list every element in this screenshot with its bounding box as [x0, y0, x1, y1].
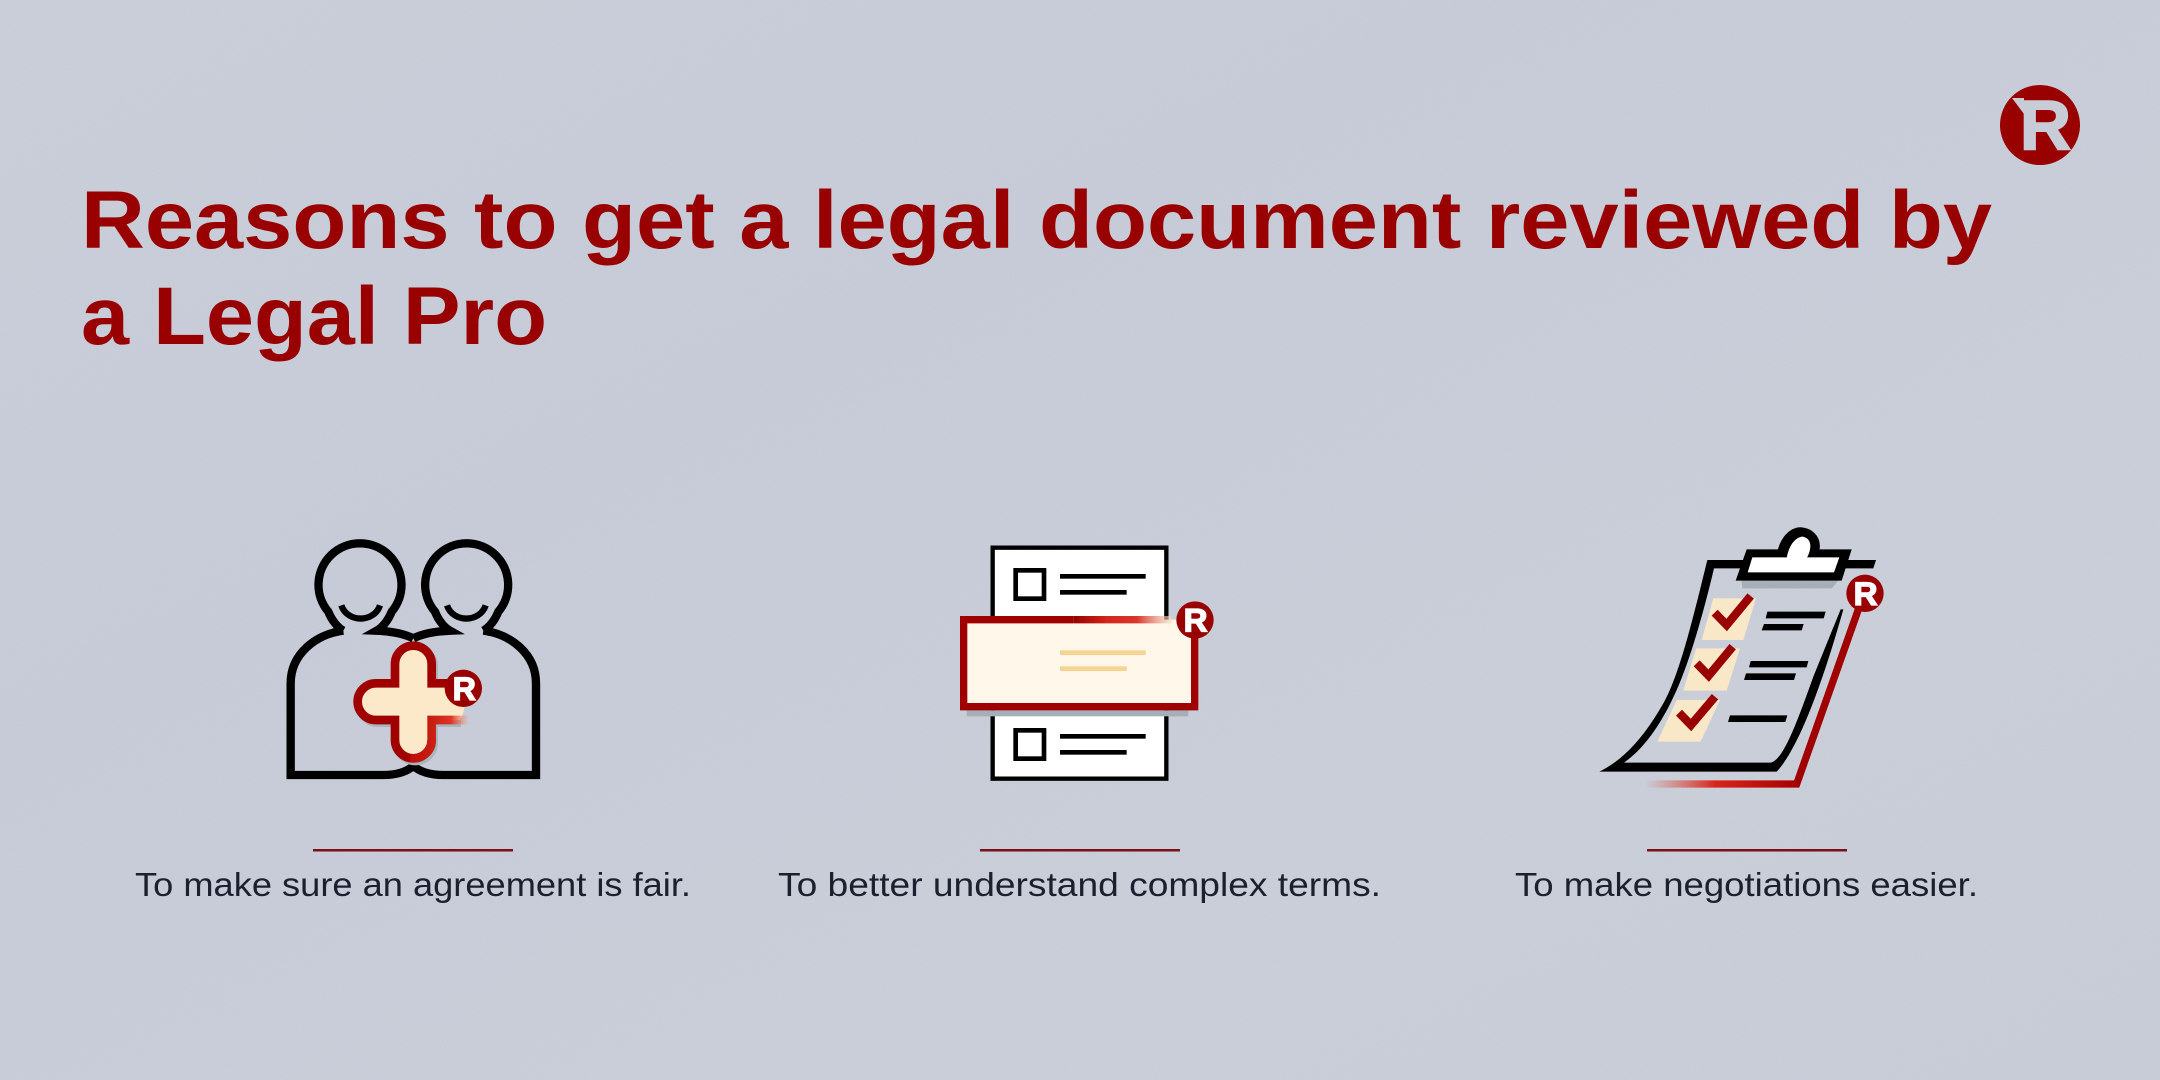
panel shadow	[967, 710, 1188, 716]
paper outline	[1599, 560, 1876, 772]
cross shadow	[360, 648, 457, 761]
cross outline	[358, 646, 457, 758]
smiles	[341, 605, 486, 619]
badge	[1846, 575, 1884, 612]
check marks	[1679, 596, 1751, 725]
title	[81, 175, 1992, 362]
document page	[993, 548, 1166, 779]
caption 1: To make sure an agreement is fair.	[135, 866, 691, 903]
logo: R badge	[2000, 85, 2080, 165]
bottom row	[1016, 730, 1146, 759]
logo: R badge: R	[2020, 86, 2071, 164]
check boxes	[1657, 598, 1756, 742]
title: a Legal Pro	[81, 271, 547, 362]
cross fill	[358, 646, 465, 758]
top row	[1016, 570, 1146, 599]
person outlines	[291, 543, 536, 775]
cross highlight	[410, 720, 467, 758]
clip	[1736, 527, 1852, 581]
caption 3: To make negotiations easier.	[1515, 866, 1978, 903]
badge: R	[1184, 603, 1208, 639]
icon: clipboard checklist	[1599, 527, 1884, 784]
icon: document with highlighted row	[964, 548, 1214, 779]
title: Reasons to get a legal document reviewed by	[81, 175, 1992, 266]
highlighted panel	[964, 620, 1195, 707]
caption 2: To better understand complex terms.	[778, 866, 1381, 903]
icon: two people with medical cross	[291, 543, 536, 775]
board edge	[1647, 607, 1859, 784]
badge: R	[1854, 576, 1878, 612]
badge: R	[453, 671, 476, 707]
clip shadow	[1742, 581, 1838, 588]
badge	[445, 670, 482, 707]
text lines	[1728, 612, 1826, 722]
badge	[1176, 601, 1214, 639]
